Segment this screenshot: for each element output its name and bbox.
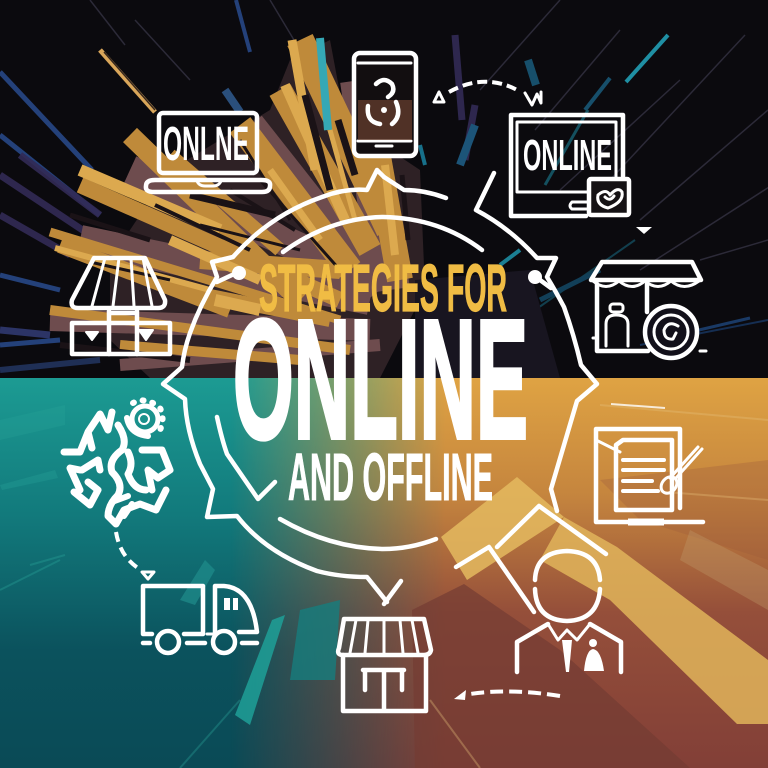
title	[233, 251, 528, 515]
node: right	[528, 270, 551, 288]
arrow: businessman to store	[454, 690, 560, 700]
background: lower shards	[0, 405, 768, 768]
icon: laptop online	[146, 113, 270, 192]
icon: smartphone	[354, 53, 416, 156]
background: colored lower half	[0, 378, 768, 768]
background: thin speed lines	[0, 0, 768, 370]
icon: awning store left	[72, 258, 170, 354]
arrow: phone to monitor	[434, 82, 541, 105]
icon: storefront with coin	[591, 262, 706, 358]
circular frame	[163, 170, 606, 612]
icon: delivery truck	[143, 586, 257, 653]
icon: document with pen	[596, 429, 703, 522]
icon: monitor online	[511, 115, 629, 216]
icon: laptop online: ONLNE	[163, 118, 249, 171]
arrow: brain to truck	[116, 532, 154, 579]
background: dark upper half	[0, 0, 768, 380]
icon: monitor online: ONLINE	[523, 131, 612, 180]
icon: businessman	[517, 551, 621, 672]
title: AND OFFLINE	[288, 440, 493, 515]
icon: brain with gears	[64, 400, 170, 524]
background: gold burst of shards	[50, 38, 560, 378]
arrow: small triangle marker	[636, 227, 652, 234]
icon: storefront bottom	[338, 619, 431, 711]
node: left	[217, 266, 246, 282]
decorative line on doc	[611, 404, 665, 408]
